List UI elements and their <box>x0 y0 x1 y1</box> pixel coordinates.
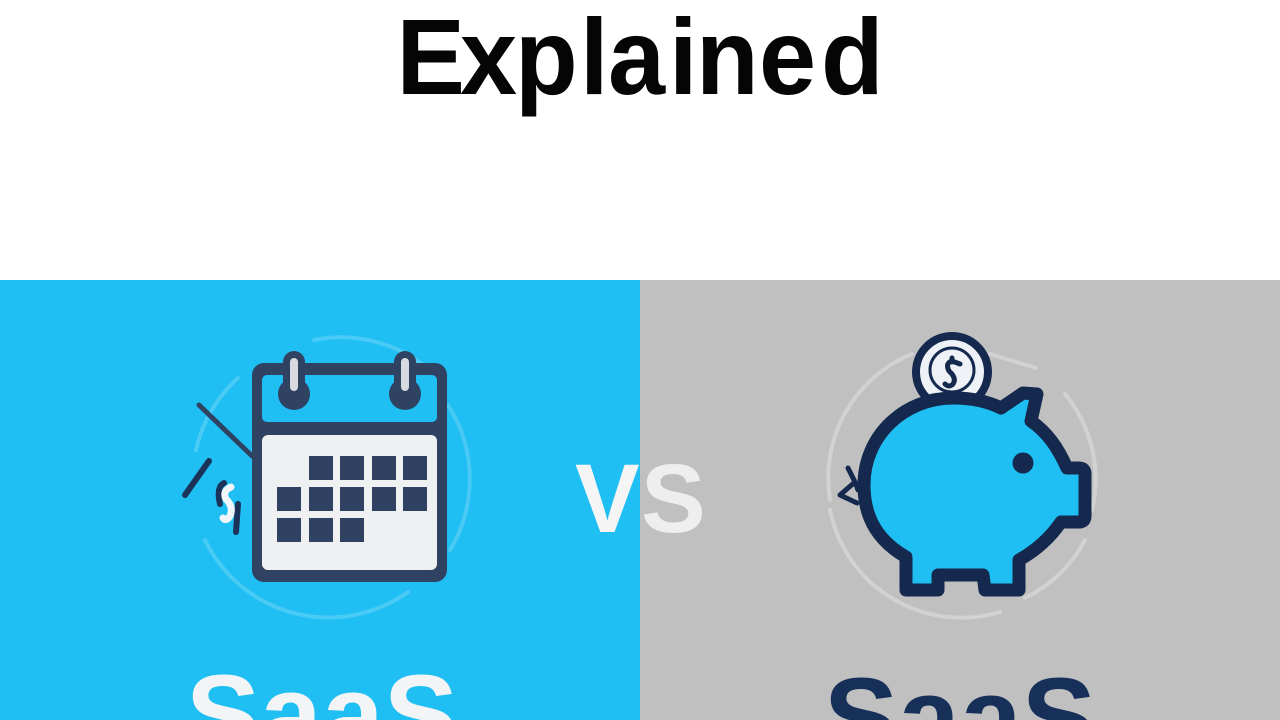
calendar page <box>262 435 437 570</box>
pig body <box>864 393 1085 590</box>
coin dollar sign <box>945 358 960 386</box>
icon: piggy bank <box>828 336 1096 618</box>
coin <box>916 336 988 408</box>
calendar frame <box>252 363 447 582</box>
vs badge text: S <box>641 444 706 553</box>
small dollar glyph <box>223 487 231 520</box>
accent strokes <box>185 405 252 532</box>
icon ring <box>196 337 470 617</box>
binder ring right <box>389 351 421 410</box>
icon: subscription calendar <box>185 337 470 617</box>
icon ring <box>828 354 1096 618</box>
calendar day squares <box>277 456 427 542</box>
vs badge text <box>575 444 706 553</box>
pig tail <box>840 468 858 503</box>
calendar header window <box>262 375 437 422</box>
panel: left blue <box>0 280 640 720</box>
pig eye <box>1012 452 1034 474</box>
panel: right grey <box>640 280 1280 720</box>
vs badge text: V <box>575 444 640 553</box>
binder ring left <box>278 351 310 410</box>
title: Explained <box>397 0 884 118</box>
